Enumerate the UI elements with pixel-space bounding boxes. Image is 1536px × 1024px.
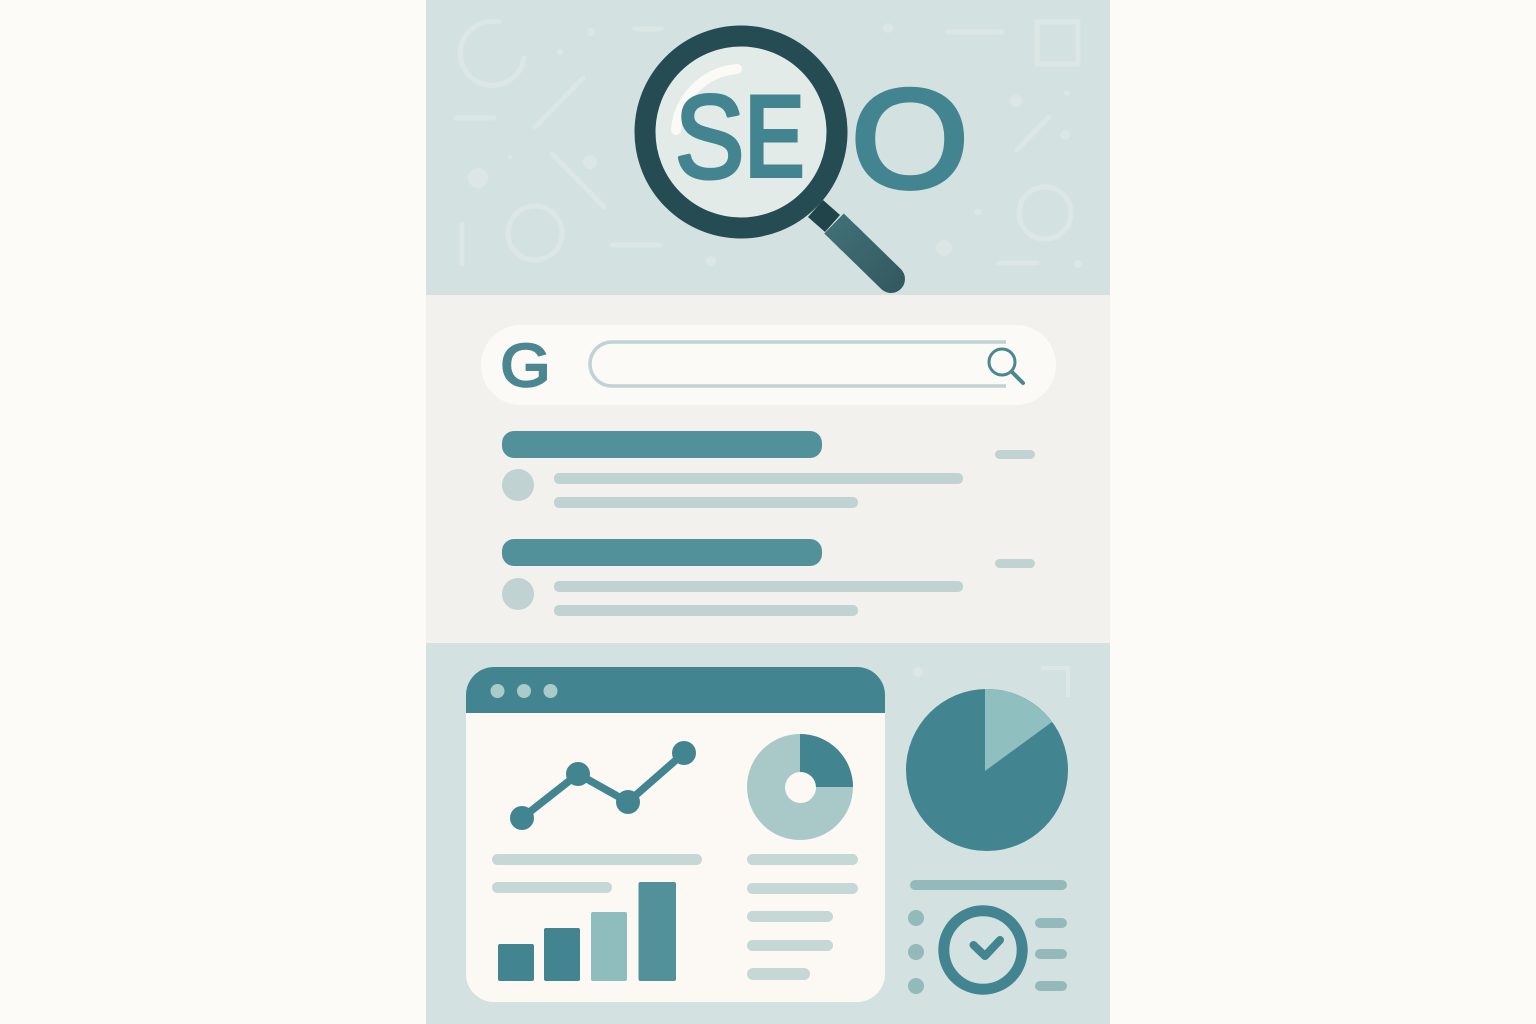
text placeholder lines	[492, 854, 858, 980]
icon: G logo: G	[500, 333, 550, 400]
search result 1	[502, 431, 1035, 508]
status list	[908, 880, 1067, 994]
panel: SEO hero	[426, 0, 1110, 295]
title: SEO wordmark: E	[744, 68, 806, 204]
panel: search results	[426, 295, 1110, 643]
panel: analytics	[426, 643, 1110, 1024]
title: SEO wordmark	[675, 60, 969, 217]
search bar	[481, 325, 1056, 405]
icon: check badge	[944, 911, 1022, 989]
icon: magnifying glass	[645, 36, 891, 279]
icon: search	[989, 349, 1023, 383]
background doodles	[456, 21, 1082, 268]
title: SEO wordmark: O	[851, 60, 969, 217]
browser window	[466, 667, 885, 1002]
line chart	[510, 741, 696, 830]
title: SEO wordmark: S	[675, 70, 744, 203]
donut chart	[747, 734, 853, 840]
pie chart	[906, 689, 1068, 851]
bar chart	[498, 882, 676, 981]
search input	[590, 342, 1006, 386]
search result 2	[502, 539, 1035, 616]
